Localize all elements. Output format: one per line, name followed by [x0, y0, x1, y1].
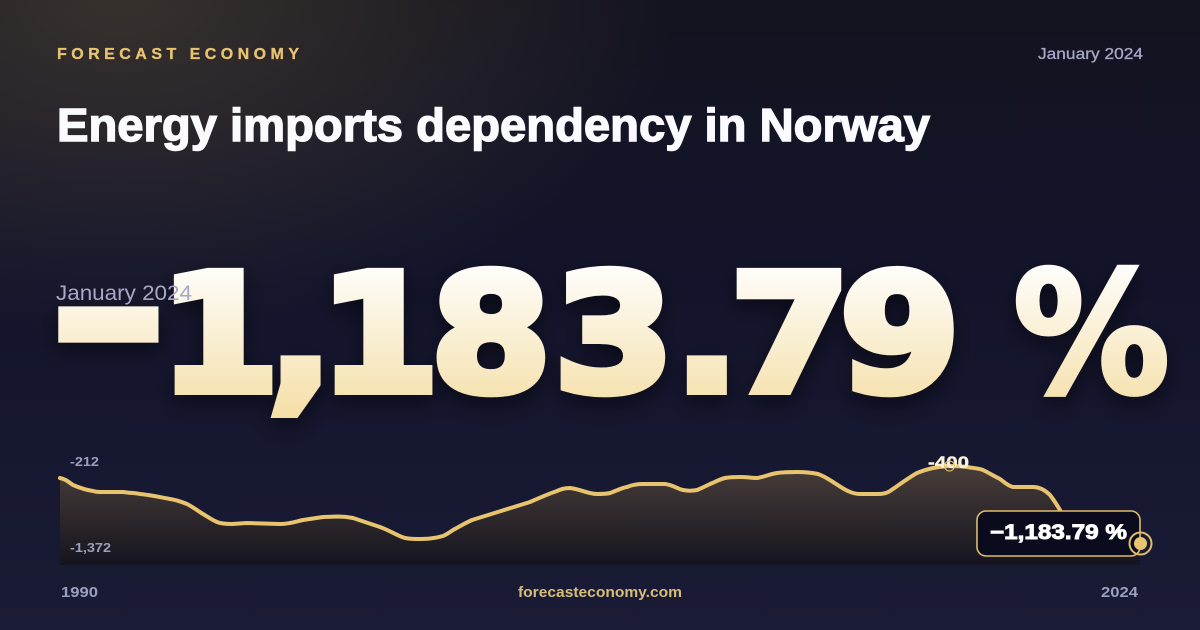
end year: 2024: [1101, 585, 1138, 601]
callout: latest value: [977, 511, 1140, 556]
start year: 1990: [61, 585, 98, 601]
axis max label: -212: [70, 454, 99, 469]
area chart: [60, 466, 1140, 565]
area fill: [60, 466, 1140, 565]
peak label: -400: [928, 453, 969, 472]
peak marker: [944, 461, 954, 471]
callout: latest value: −1,183.79 %: [990, 521, 1127, 544]
end point marker: [1130, 532, 1152, 554]
title: Energy imports dependency in Norway: [57, 99, 930, 151]
kicker: brand name: FORECAST ECONOMY: [57, 46, 299, 63]
trend line: [60, 466, 1060, 539]
value date label: January 2024: [56, 282, 192, 305]
big value: 1,183.79: [159, 241, 960, 429]
big value: %: [1013, 237, 1170, 432]
big value: −: [52, 227, 165, 412]
big value: [52, 227, 1170, 432]
date top right: January 2024: [1038, 46, 1143, 63]
source website: forecasteconomy.com: [518, 585, 682, 601]
axis min label: -1,372: [70, 540, 111, 555]
